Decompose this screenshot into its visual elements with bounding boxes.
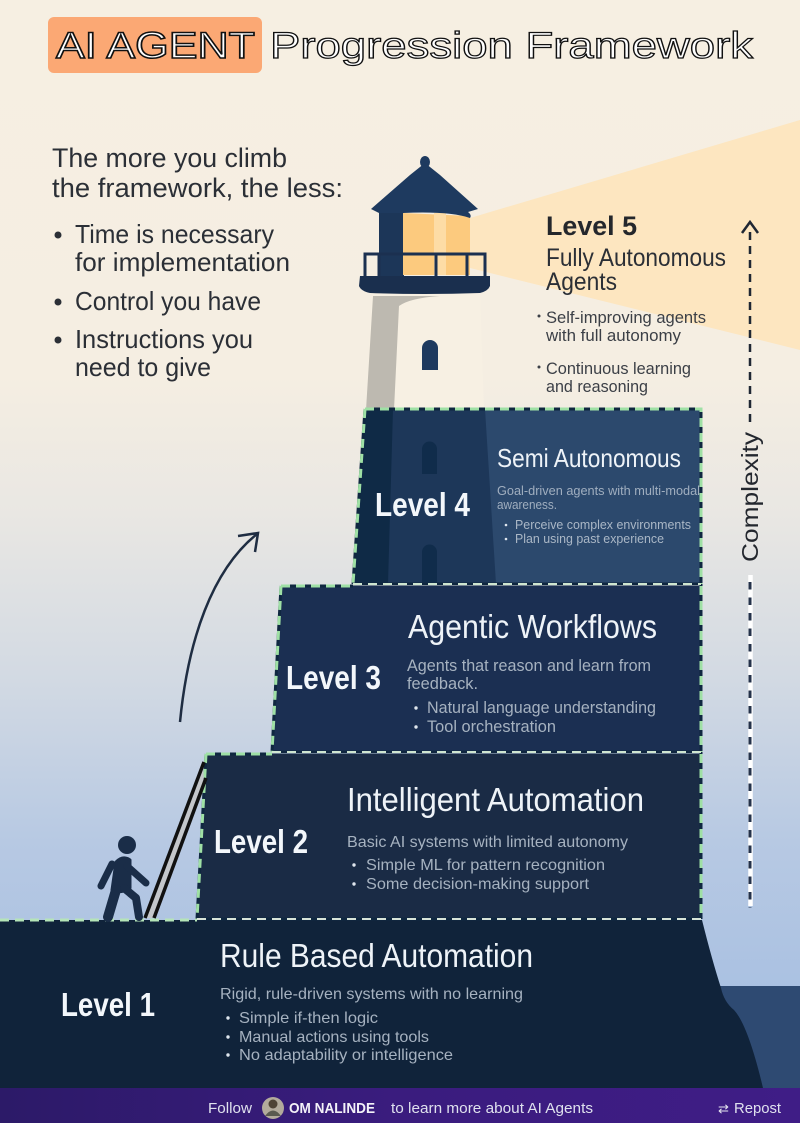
level 4 window lower [422, 545, 437, 584]
level 4 window upper [422, 442, 437, 474]
level 2 bullets: Simple ML for pattern recognition [366, 857, 605, 874]
ladder [145, 762, 206, 918]
bullet: instructions: need to give [75, 352, 211, 382]
level 5 bullets [538, 308, 706, 396]
level 1 heading: Rule Based Automation [220, 937, 533, 974]
bullet: control: Control you have [75, 286, 261, 316]
icon: repost: ⇄ [718, 1101, 729, 1116]
repost label: Repost [734, 1100, 782, 1117]
arrow shaft lower white [748, 575, 753, 906]
level 5 bullets: Continuous learning [546, 359, 691, 378]
level 5 bullets: and reasoning [546, 377, 648, 396]
level 1 label: Level 1 [61, 986, 155, 1023]
level 3 description: Agents that reason and learn from [407, 657, 651, 675]
level 3 heading: Agentic Workflows [408, 608, 657, 645]
footer background [0, 1088, 800, 1123]
level 4 tower shadow [353, 409, 393, 584]
title highlight [48, 17, 262, 73]
complexity label: Complexity [737, 431, 763, 562]
roof finial [420, 156, 430, 168]
level 1 description: Rigid, rule-driven systems with no learning [220, 986, 523, 1003]
level 5 label: Level 5 [546, 211, 637, 241]
level 3 bullets [414, 699, 656, 736]
tower shadow [366, 296, 440, 410]
level 2 block [197, 754, 701, 919]
level 2 description: Basic AI systems with limited autonomy [347, 834, 628, 851]
avatar [262, 1097, 284, 1119]
author name: OM NALINDE [289, 1100, 375, 1117]
level 4 bullets [505, 518, 691, 546]
bullet: time: for implementation [75, 247, 290, 277]
complexity arrow [737, 222, 763, 908]
gallery railing [365, 254, 485, 276]
title [48, 17, 754, 73]
level 3 description: feedback. [407, 675, 478, 693]
title text: AI AGENT: AI AGENT [56, 25, 255, 66]
lantern room [379, 210, 404, 276]
bullet: time [54, 219, 290, 277]
level 5 bullets: Self-improving agents [546, 308, 706, 327]
level 5 title: Agents [546, 268, 617, 296]
arrow shaft upper [749, 232, 751, 425]
tower [366, 293, 484, 410]
panel: level 1 [0, 920, 763, 1088]
level 4 block [353, 409, 701, 584]
level 4 bullets: Plan using past experience [515, 532, 664, 546]
icon: climbing person [101, 836, 146, 917]
level 1 bullets [226, 1010, 453, 1064]
bullet: instructions: Instructions you [75, 324, 253, 354]
panel: level 5 text [538, 211, 726, 396]
title text: framework: Progression Framework [270, 25, 754, 66]
level 4 heading: Semi Autonomous [497, 443, 681, 473]
growth arrow [180, 533, 258, 722]
follow text: Follow [208, 1100, 252, 1117]
level 3 label: Level 3 [286, 659, 381, 696]
level 1 base [0, 920, 763, 1088]
panel: level 4 [353, 409, 701, 584]
intro heading: the framework, the less: [52, 173, 343, 203]
arrow head [742, 222, 758, 233]
level 5 title: Fully Autonomous [546, 244, 726, 272]
level 4 description: Goal-driven agents with multi-modal [497, 484, 700, 498]
level 3 bullets: Tool orchestration [427, 718, 556, 736]
roof [371, 163, 478, 218]
call to action: to learn more about AI Agents [391, 1100, 593, 1117]
dashed step outlines [0, 409, 701, 920]
panel: level 2 [197, 754, 701, 919]
dark step edges [197, 409, 701, 919]
intro heading: The more you climb [52, 143, 287, 173]
arrow shaft lower dark [748, 582, 752, 908]
level 3 block [272, 586, 701, 752]
level 3 bullets: Natural language understanding [427, 699, 656, 717]
level 2 heading: Intelligent Automation [347, 781, 644, 818]
tower window [422, 340, 438, 370]
level 4 tower body [353, 409, 496, 584]
level 5 bullets: with full autonomy [545, 326, 681, 345]
level 2 label: Level 2 [214, 823, 308, 860]
level 4 description: awareness. [497, 498, 557, 512]
level 4 bullets: Perceive complex environments [515, 518, 691, 532]
intro text block [52, 143, 343, 382]
lighthouse [359, 156, 490, 410]
level 2 bullets: Some decision-making support [366, 876, 590, 893]
level 1 bullets: Manual actions using tools [239, 1029, 429, 1046]
gallery deck [359, 276, 490, 294]
footer bar [0, 1088, 800, 1123]
level 2 bullets [352, 857, 605, 893]
bullet: time: Time is necessary [75, 219, 274, 249]
panel: level 3 [272, 586, 701, 752]
level 1 bullets: Simple if-then logic [239, 1010, 378, 1027]
lantern glass [403, 213, 470, 275]
light beam [470, 120, 800, 350]
level 1 bullets: No adaptability or intelligence [239, 1047, 453, 1064]
bullet: instructions [54, 324, 253, 382]
sea [690, 986, 800, 1091]
level 4 label: Level 4 [375, 486, 471, 523]
